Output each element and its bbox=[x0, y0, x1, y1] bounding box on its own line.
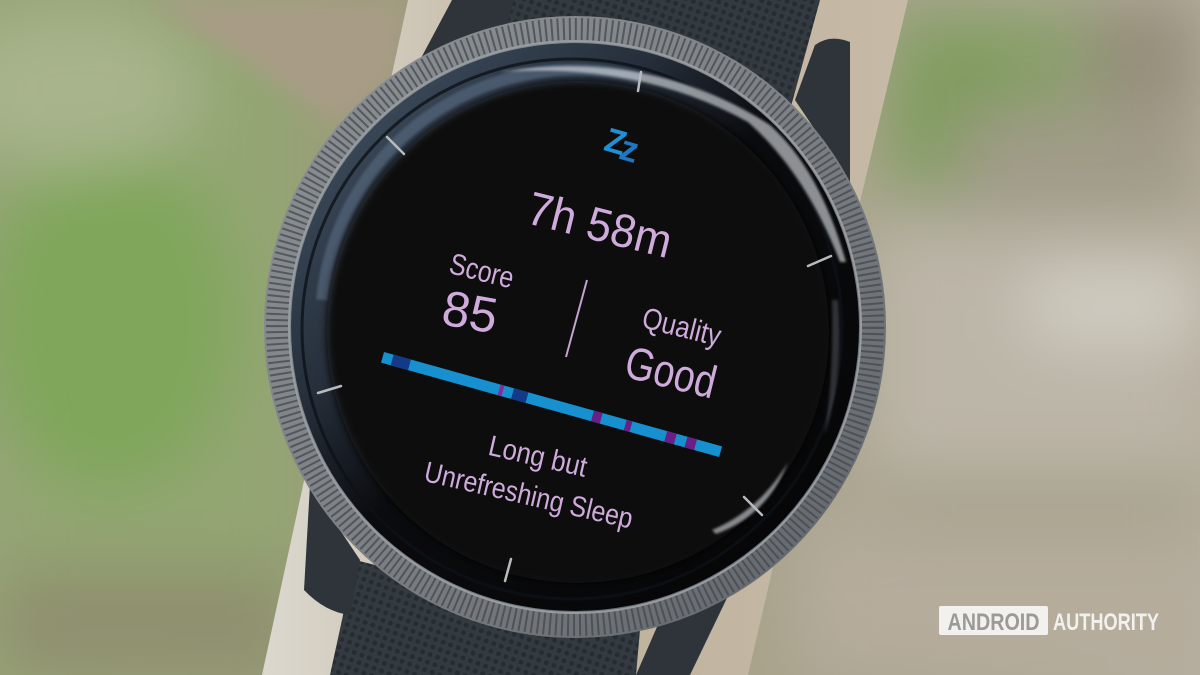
watermark: AUTHORITY bbox=[1053, 609, 1159, 636]
sleep stages bar bbox=[381, 352, 722, 457]
glass reflection right bbox=[824, 300, 839, 436]
glass light band upper left bbox=[322, 70, 640, 300]
branch: blurred background wood bbox=[150, 0, 400, 125]
sleep duration: 7h 58m bbox=[522, 181, 678, 268]
screen black area bbox=[327, 81, 829, 583]
score: 85 bbox=[438, 280, 502, 344]
watch case bbox=[264, 16, 886, 638]
bezel ring bbox=[264, 16, 886, 638]
watermark bbox=[939, 606, 1159, 636]
icon: sleep Zz: Z bbox=[600, 121, 631, 163]
divider bbox=[566, 280, 587, 357]
quality: Quality bbox=[639, 302, 724, 353]
quality: Good bbox=[620, 336, 722, 408]
glass dark inner groove bbox=[302, 59, 842, 599]
hour marks bbox=[318, 72, 831, 581]
sleep description bbox=[421, 430, 636, 535]
glass reflection top bbox=[500, 66, 846, 262]
watermark: ANDROID bbox=[948, 609, 1040, 636]
score: Score bbox=[446, 248, 517, 295]
glass bbox=[291, 43, 859, 611]
wooden post bbox=[262, 0, 908, 675]
glass reflection lower right bbox=[712, 462, 788, 534]
bezel inner rim bbox=[289, 41, 861, 613]
strap: top bbox=[490, 0, 820, 110]
watch lugs bbox=[304, 0, 850, 675]
strap: bottom bbox=[330, 560, 640, 675]
bezel knurling bbox=[277, 29, 873, 625]
quality bbox=[620, 302, 724, 408]
score bbox=[438, 248, 517, 344]
sleep description: Long but bbox=[485, 430, 590, 484]
icon: sleep Zz: z bbox=[615, 126, 644, 171]
sleep description: Unrefreshing Sleep bbox=[421, 456, 636, 535]
